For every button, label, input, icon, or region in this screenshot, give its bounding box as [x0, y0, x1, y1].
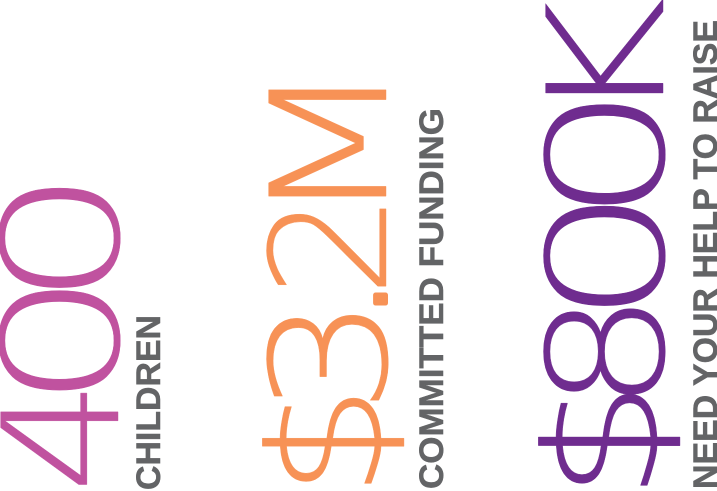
number: $3.2M [236, 58, 425, 491]
number: $800K: 0 [515, 84, 702, 224]
number: $3.2M: 2 [236, 192, 424, 298]
label: children: CHILDREN [130, 315, 168, 490]
number: $3.2M: 3 [237, 296, 425, 414]
stat: $3.2M committed funding [236, 58, 451, 491]
stat: $800K need your help to raise [513, 0, 717, 491]
number: $3.2M: . [236, 273, 424, 325]
number: $800K: 8 [514, 291, 701, 412]
number: $800K: K [514, 0, 701, 127]
number: 400 [0, 168, 157, 491]
number: $800K: 0 [515, 186, 702, 325]
label: committed funding: COMMITTED FUNDING [413, 108, 451, 489]
stat: 400 children [0, 168, 168, 491]
number: $800K [513, 0, 702, 491]
number: $3.2M: M [237, 58, 425, 228]
